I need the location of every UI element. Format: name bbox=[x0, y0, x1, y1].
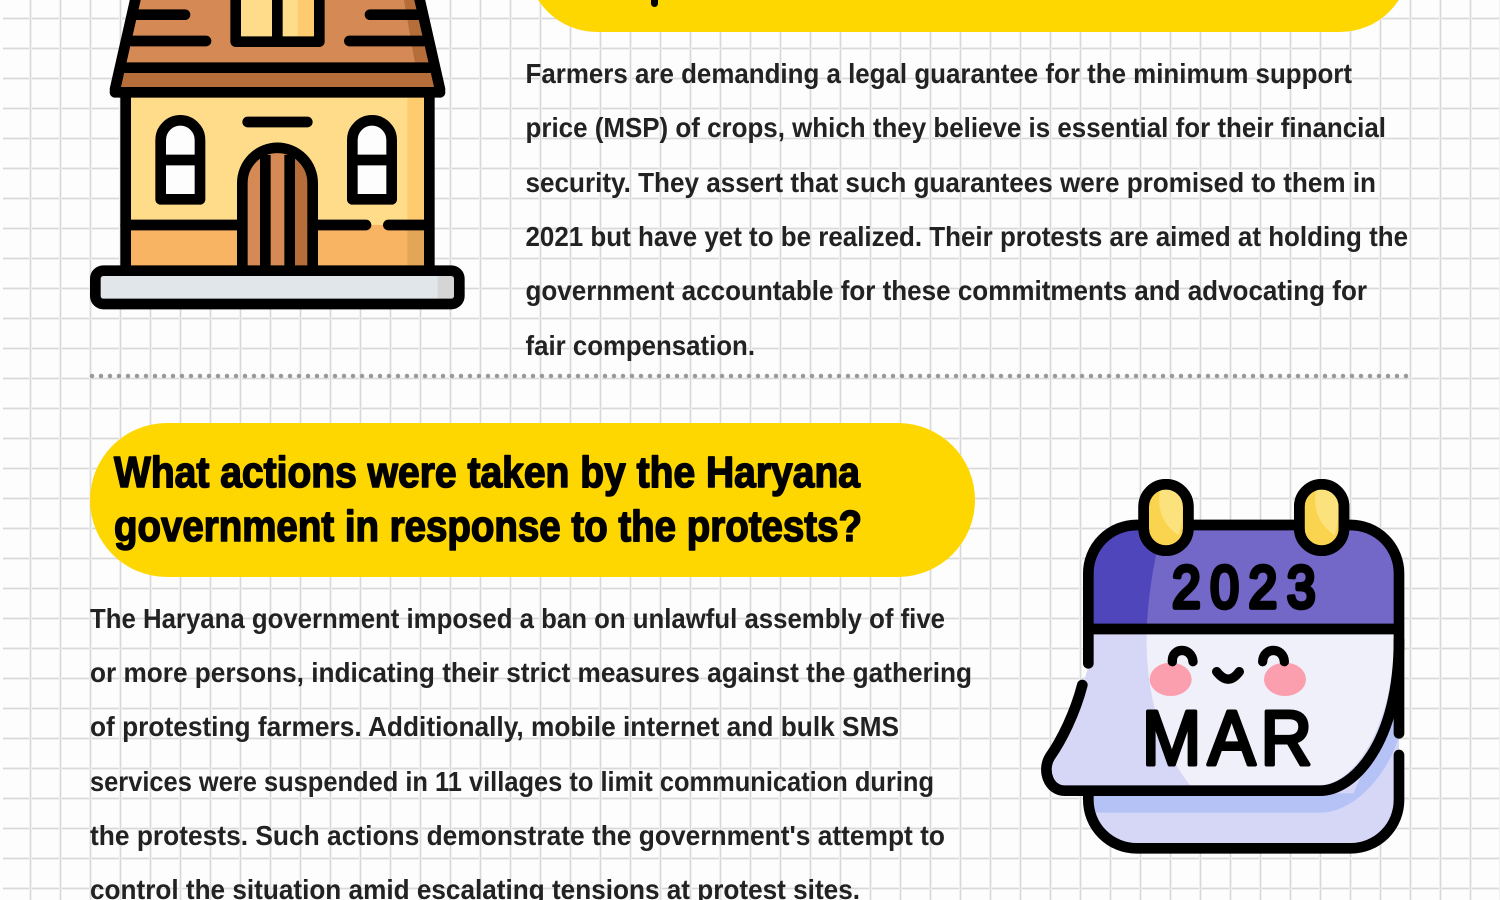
text block: MSP guarantee paragraph: Farmers are demanding a legal guarantee for the minimum support bbox=[526, 58, 1352, 89]
text block: government response paragraph bbox=[90, 603, 972, 900]
text block: MSP guarantee paragraph bbox=[526, 58, 1408, 361]
text block: government response paragraph: or more persons, indicating their strict measures against the gathering bbox=[90, 657, 972, 688]
heading pill: Haryana government actions: government in response to the protests? bbox=[114, 502, 862, 551]
panel: Haryana government actions section bbox=[90, 423, 1399, 900]
text block: government response paragraph: The Haryana government imposed a ban on unlawful assembly of five bbox=[90, 603, 945, 634]
icon: calendar March 2023: MAR bbox=[1142, 695, 1312, 781]
text block: MSP guarantee paragraph: fair compensation. bbox=[526, 330, 755, 361]
text block: MSP guarantee paragraph: price (MSP) of crops, which they believe is essential for their financial bbox=[526, 112, 1386, 143]
icon: calendar March 2023 bbox=[1046, 484, 1399, 848]
heading pill: Haryana government actions bbox=[90, 423, 975, 577]
panel: MSP demands section bbox=[95, 0, 1410, 361]
heading pill: Haryana government actions: What actions were taken by the Haryana bbox=[114, 448, 860, 497]
text block: government response paragraph: of protesting farmers. Additionally, mobile internet and bulk SMS bbox=[90, 711, 899, 742]
text block: MSP guarantee paragraph: security. They assert that such guarantees were promised to them in bbox=[526, 167, 1376, 198]
icon: calendar March 2023: 2023 bbox=[1172, 554, 1316, 620]
text block: MSP guarantee paragraph: 2021 but have yet to be realized. Their protests are aimed at holding the bbox=[526, 221, 1408, 252]
heading pill: cropped top heading bbox=[527, 0, 1410, 32]
icon: house bbox=[95, 0, 459, 304]
text block: government response paragraph: the protests. Such actions demonstrate the government's attempt to bbox=[90, 820, 945, 851]
text block: government response paragraph: services were suspended in 11 villages to limit communication during bbox=[90, 766, 934, 797]
text block: MSP guarantee paragraph: government accountable for these commitments and advocating for bbox=[526, 275, 1367, 306]
